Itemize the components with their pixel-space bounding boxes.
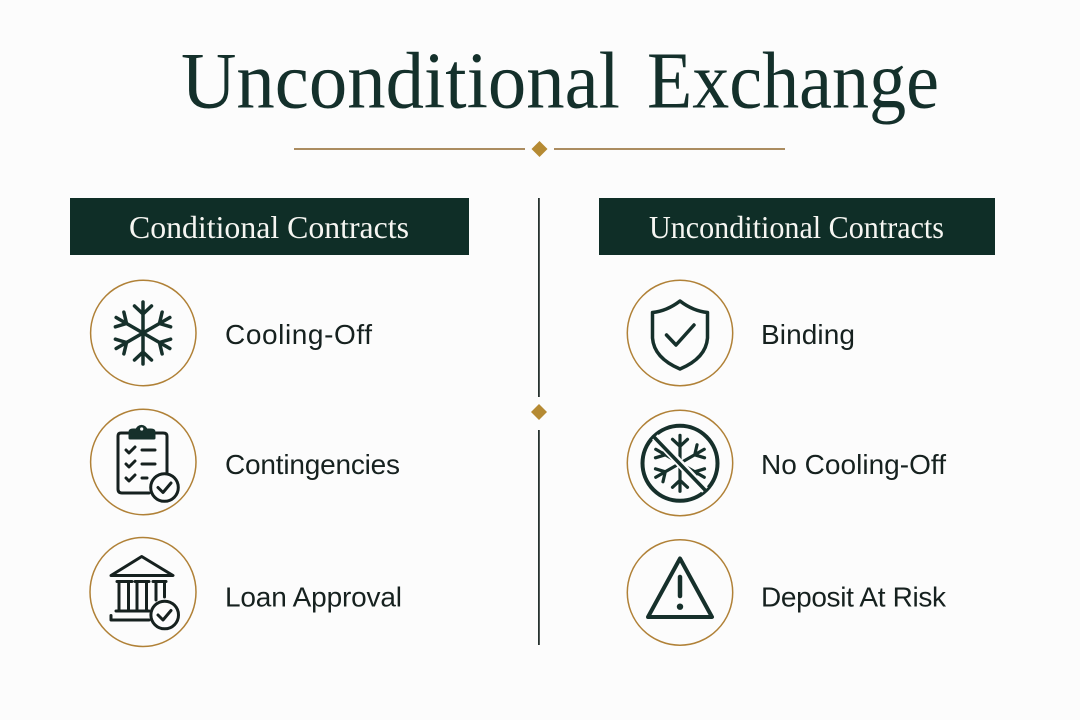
item: binding: Binding <box>761 319 855 350</box>
icon: shield with check <box>652 301 708 369</box>
icon: bank with check <box>111 556 178 629</box>
title divider <box>294 141 785 157</box>
panel: conditional contracts <box>70 198 469 646</box>
item: contingencies <box>91 409 400 515</box>
heading: conditional contracts <box>70 198 469 255</box>
title: Exchange <box>647 38 939 126</box>
heading: conditional contracts: Conditional Contracts <box>129 209 409 245</box>
item: loan approval <box>90 538 402 646</box>
icon: snowflake <box>112 302 174 364</box>
item: deposit at risk: Deposit At Risk <box>761 582 947 612</box>
icon: crossed-out snowflake <box>642 426 718 501</box>
item: contingencies: Contingencies <box>225 449 400 480</box>
title <box>181 38 939 126</box>
center divider <box>531 198 547 645</box>
icon: clipboard with check <box>118 426 178 501</box>
item: cooling-off <box>91 280 372 386</box>
heading: unconditional contracts: Unconditional Contracts <box>649 209 944 245</box>
item: no cooling-off: No Cooling-Off <box>761 449 946 480</box>
item: no cooling-off <box>627 410 946 516</box>
panel: unconditional contracts <box>599 198 995 645</box>
title: Unconditional <box>181 38 620 126</box>
item: cooling-off: Cooling-Off <box>225 319 372 350</box>
item: binding <box>627 280 855 386</box>
item: loan approval: Loan Approval <box>225 582 402 612</box>
item: deposit at risk <box>627 540 947 645</box>
heading: unconditional contracts <box>599 198 995 255</box>
icon: warning triangle <box>648 558 712 617</box>
